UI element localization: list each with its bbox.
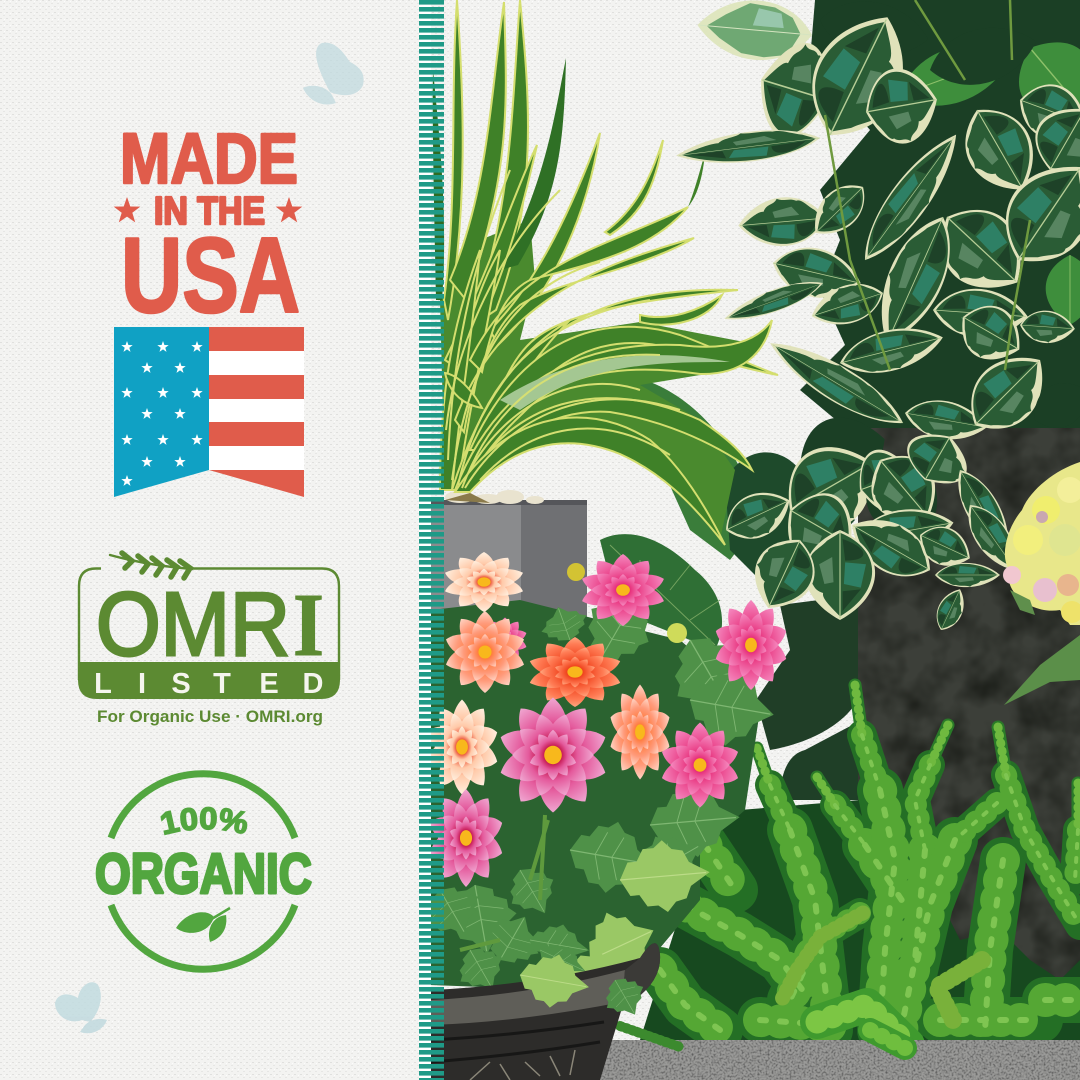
heading: made in the USA: IN THE (154, 190, 265, 233)
text: 100%: 100% (160, 806, 248, 836)
succulents (640, 685, 1080, 1045)
badge: 100% organic (95, 770, 312, 973)
plant composition (414, 0, 1080, 1080)
green fiddle leaf (600, 534, 722, 650)
stone ledge (600, 1040, 1080, 1080)
dark fiddle leaves (756, 595, 858, 800)
back foliage: dark mass behind ivy (800, 0, 1080, 440)
stems (825, 0, 1030, 370)
text: OMRI: OMR (96, 575, 290, 675)
heading: made in the USA (120, 120, 300, 335)
grey planter (431, 500, 587, 617)
pebbles (445, 490, 544, 504)
spider plant (433, 0, 778, 545)
box outline (79, 568, 339, 680)
heading: made in the USA: MADE (120, 120, 298, 199)
black flower pot (431, 943, 660, 1080)
dahlia flowers (424, 552, 789, 887)
icon: flag ribbon (114, 327, 304, 497)
icon: butterfly top (303, 43, 364, 105)
badge: OMRI listed (78, 553, 340, 726)
stripe backing (419, 0, 431, 1080)
seal ring arcs (111, 774, 295, 969)
band (78, 662, 340, 699)
teal stripe column (419, 0, 444, 1080)
arc guide (163, 829, 247, 835)
blade stripes (446, 170, 680, 488)
icon: red stars (114, 197, 302, 222)
bright trailing succulent (817, 1005, 908, 1045)
heading: made in the USA: USA (121, 215, 300, 335)
badge: made in the USA (114, 120, 304, 497)
blade mass (440, 220, 760, 540)
succulent spikes (660, 685, 1080, 1035)
variegated ivy (674, 0, 1080, 635)
text: OMRI: I (293, 576, 324, 675)
text: for organic use: For Organic Use · OMRI.org (97, 708, 323, 726)
dark leaf right of spider plant (727, 452, 855, 576)
icon: butterfly bottom (55, 982, 107, 1033)
big green fiddle leaf behind spider plant (640, 383, 738, 560)
flower buds (567, 563, 585, 581)
dark planter (858, 428, 1080, 977)
hydrangea (1003, 462, 1080, 705)
individual blades (433, 0, 778, 545)
icon: leaf (176, 908, 230, 942)
icon: sprig (110, 553, 192, 578)
dahlia foliage (431, 600, 774, 987)
text: organic: ORGANIC (95, 842, 312, 906)
text: LISTED: LISTED (94, 668, 323, 700)
trailing sprig (620, 1026, 680, 1047)
